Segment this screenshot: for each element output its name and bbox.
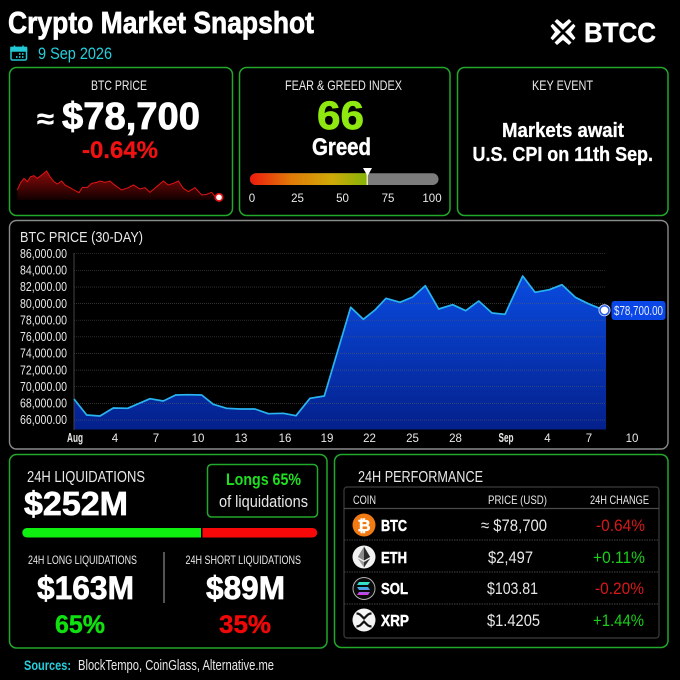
y axis labels: 76,000.00 [20, 330, 67, 344]
sources [24, 657, 274, 674]
x axis labels: 7 [153, 433, 159, 445]
x axis labels: 4 [112, 433, 119, 445]
y axis labels: 74,000.00 [20, 347, 67, 361]
total: $252M [24, 485, 128, 522]
row: SOL [353, 578, 644, 600]
y axis labels: 84,000.00 [20, 264, 67, 278]
row: ETH: +0.11% [593, 548, 645, 567]
y axis labels: 72,000.00 [20, 363, 67, 377]
x axis labels [67, 431, 638, 445]
logo: BTCC [550, 17, 656, 48]
x axis labels: 16 [279, 433, 291, 445]
approx sign: ≈ [37, 104, 54, 134]
row: XRP: +1.44% [593, 611, 644, 630]
long liquidations [28, 553, 137, 639]
row: ETH: ETH [381, 550, 407, 567]
panel: key event [458, 68, 668, 216]
short liquidations: 24H SHORT LIQUIDATIONS [186, 553, 301, 567]
row: XRP [352, 608, 644, 632]
split bar [22, 528, 317, 538]
row: SOL: SOL [381, 581, 408, 598]
row: SOL: $103.81 [487, 579, 538, 598]
y axis labels: 78,000.00 [20, 314, 67, 328]
row: BTC: ₿ [357, 517, 371, 535]
y axis labels: 80,000.00 [20, 297, 67, 311]
heading: 24H PERFORMANCE [358, 469, 483, 486]
sources: Sources: [24, 657, 71, 673]
x axis labels: 25 [406, 433, 419, 445]
row: BTC: BTC [381, 518, 407, 535]
long liquidations: 65% [55, 611, 105, 639]
current price tag [612, 301, 666, 320]
y axis labels: 68,000.00 [20, 397, 67, 411]
logo wordmark: BTCC [584, 17, 656, 48]
icon: BTCC mark [550, 19, 576, 45]
x axis labels: 22 [363, 433, 376, 445]
x axis labels: 7 [586, 433, 592, 445]
table header: PRICE (USD) [488, 493, 547, 507]
row: SOL: -0.20% [595, 579, 644, 598]
title: Crypto Market Snapshot [8, 5, 314, 40]
sentiment: Greed [312, 134, 371, 161]
area series [74, 276, 606, 430]
x axis labels: 10 [192, 433, 204, 445]
label: KEY EVENT [532, 77, 593, 93]
grid lines [74, 254, 606, 420]
table header: COIN [353, 493, 376, 507]
x axis labels: 10 [626, 433, 638, 445]
index value: 66 [317, 94, 364, 138]
chart heading: BTC PRICE (30-DAY) [20, 229, 143, 246]
label: FEAR & GREED INDEX [285, 77, 403, 93]
x axis labels: 28 [449, 433, 462, 445]
long liquidations: 24H LONG LIQUIDATIONS [28, 553, 137, 567]
sources: BlockTempo, CoinGlass, Alternative.me [78, 658, 274, 674]
label: BTC PRICE [91, 77, 147, 93]
row: BTC: -0.64% [596, 516, 645, 535]
gauge: 100 [422, 193, 442, 205]
y axis labels: 82,000.00 [20, 280, 67, 294]
row: XRP: $1.4205 [487, 611, 540, 630]
y axis labels: 86,000.00 [20, 247, 67, 261]
x axis labels: Aug [67, 431, 83, 445]
long liquidations: $163M [37, 570, 134, 606]
x axis labels: Sep [498, 431, 514, 445]
heading: 24H LIQUIDATIONS [27, 469, 145, 486]
short liquidations: 35% [219, 611, 271, 639]
row: BTC: ≈ $78,700 [481, 516, 547, 535]
gauge: 50 [336, 193, 349, 205]
table header [353, 493, 649, 507]
row: XRP: XRP [381, 613, 409, 630]
row: BTC [352, 514, 645, 536]
gauge: 25 [291, 193, 304, 205]
y axis labels: 66,000.00 [20, 413, 67, 427]
panel: 24h performance [334, 454, 668, 648]
x axis labels: 13 [235, 433, 247, 445]
icon: calendar [11, 46, 26, 60]
event line 2: U.S. CPI on 11th Sep. [472, 144, 653, 166]
callout: longs share [208, 464, 318, 517]
panel: BTC price [10, 68, 232, 216]
row: ETH [352, 546, 645, 568]
date row [11, 44, 112, 63]
x axis labels: 19 [321, 433, 333, 445]
table header: 24H CHANGE [590, 493, 649, 507]
price value: $78,700 [62, 96, 200, 138]
price line [74, 276, 604, 416]
event line 1: Markets await [502, 120, 624, 142]
change: -0.64% [82, 137, 158, 164]
x axis labels: 4 [544, 433, 551, 445]
current price tag: $78,700.00 [614, 304, 663, 318]
callout: longs share: Longs 65% [226, 471, 301, 489]
date: 9 Sep 2026 [38, 44, 112, 63]
y axis labels: 70,000.00 [20, 380, 67, 394]
y axis labels [20, 247, 67, 427]
sparkline [17, 171, 223, 201]
short liquidations: $89M [206, 570, 285, 606]
panel: 30-day chart [10, 220, 668, 449]
row: ETH: $2,497 [488, 548, 533, 567]
current price marker [599, 305, 610, 316]
table frame [344, 487, 659, 638]
gauge [249, 168, 442, 205]
gauge: 75 [382, 193, 394, 205]
callout: longs share: of liquidations [219, 493, 308, 511]
panel: fear and greed [240, 68, 450, 216]
short liquidations [186, 553, 301, 639]
panel: 24h liquidations [10, 454, 327, 648]
gauge: 0 [249, 193, 255, 205]
